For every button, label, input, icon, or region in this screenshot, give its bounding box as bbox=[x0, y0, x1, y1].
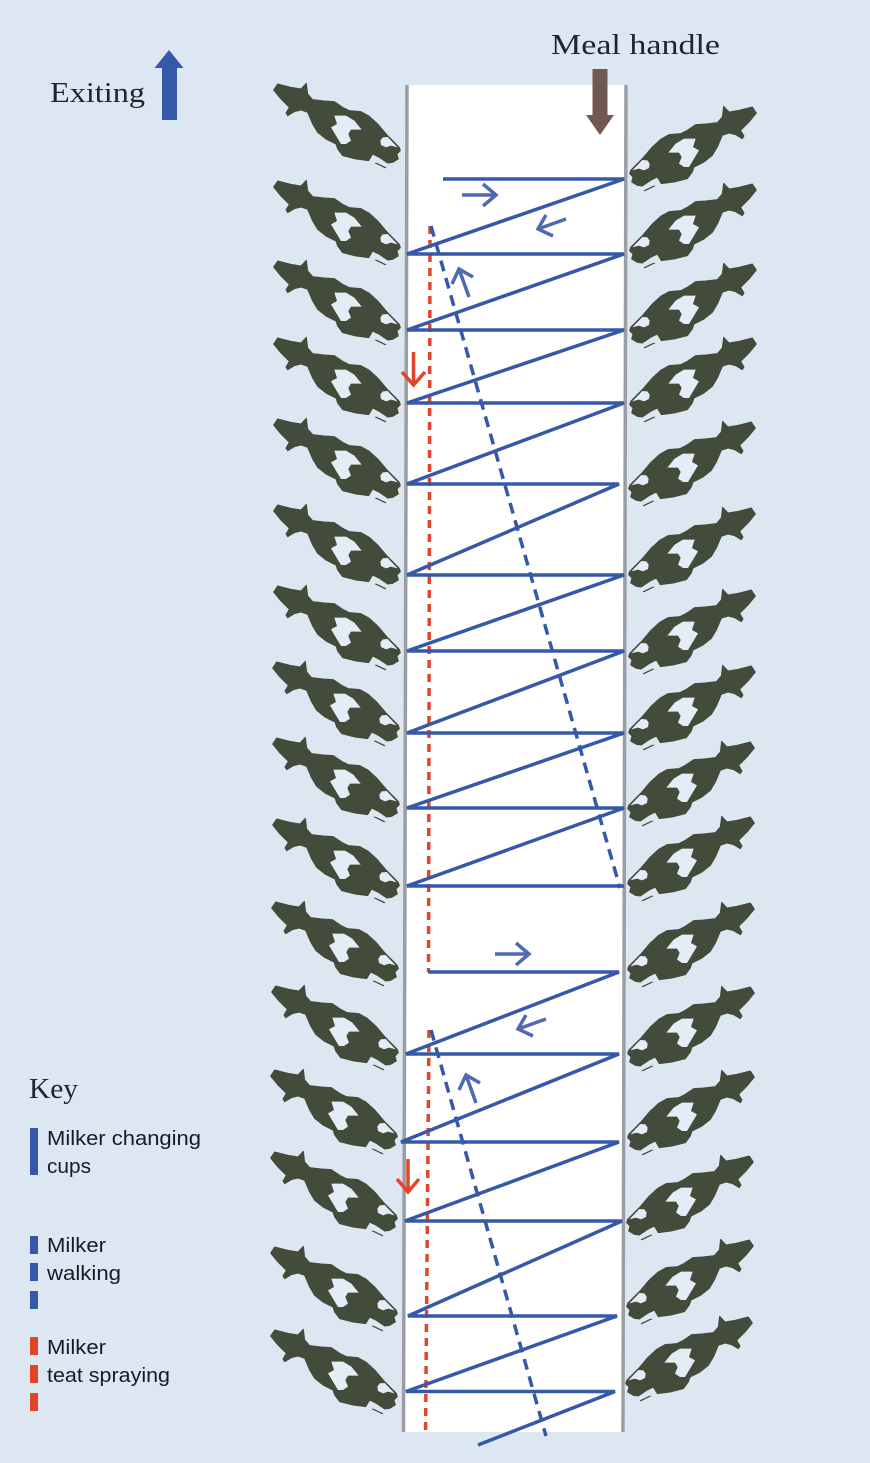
meal handle arrow bbox=[586, 69, 614, 135]
teat spraying route: lower bbox=[426, 1030, 429, 1436]
teat spraying route: upper bbox=[428, 226, 430, 972]
key heading: Key bbox=[29, 1073, 78, 1105]
exiting label: Exiting bbox=[50, 77, 145, 109]
key: milker changing cups: cups bbox=[47, 1155, 91, 1178]
key: milker teat spraying bbox=[30, 1336, 170, 1411]
direction arrows: red bbox=[397, 352, 425, 1192]
meal handle label: Meal handle bbox=[551, 29, 720, 61]
cup changing zigzag: upper bbox=[407, 179, 624, 886]
key: milker changing cups: Milker changing bbox=[47, 1127, 201, 1150]
left row of cows bbox=[271, 83, 400, 1414]
milking parlour pit bbox=[404, 85, 626, 1432]
milker walking route: upper bbox=[431, 226, 620, 888]
cup changing zigzag: lower bbox=[401, 972, 622, 1445]
key: milker changing cups bbox=[30, 1127, 201, 1178]
key: milker walking: Milker bbox=[47, 1234, 106, 1257]
key: milker teat spraying: teat spraying bbox=[47, 1364, 170, 1387]
key: milker teat spraying: Milker bbox=[47, 1336, 106, 1359]
key: milker walking bbox=[30, 1234, 121, 1309]
exiting arrow bbox=[154, 50, 184, 120]
key: milker walking: walking bbox=[46, 1262, 121, 1285]
direction arrows: blue bbox=[452, 184, 566, 1103]
milker walking route: lower bbox=[431, 1030, 546, 1436]
right row of cows bbox=[626, 106, 756, 1401]
